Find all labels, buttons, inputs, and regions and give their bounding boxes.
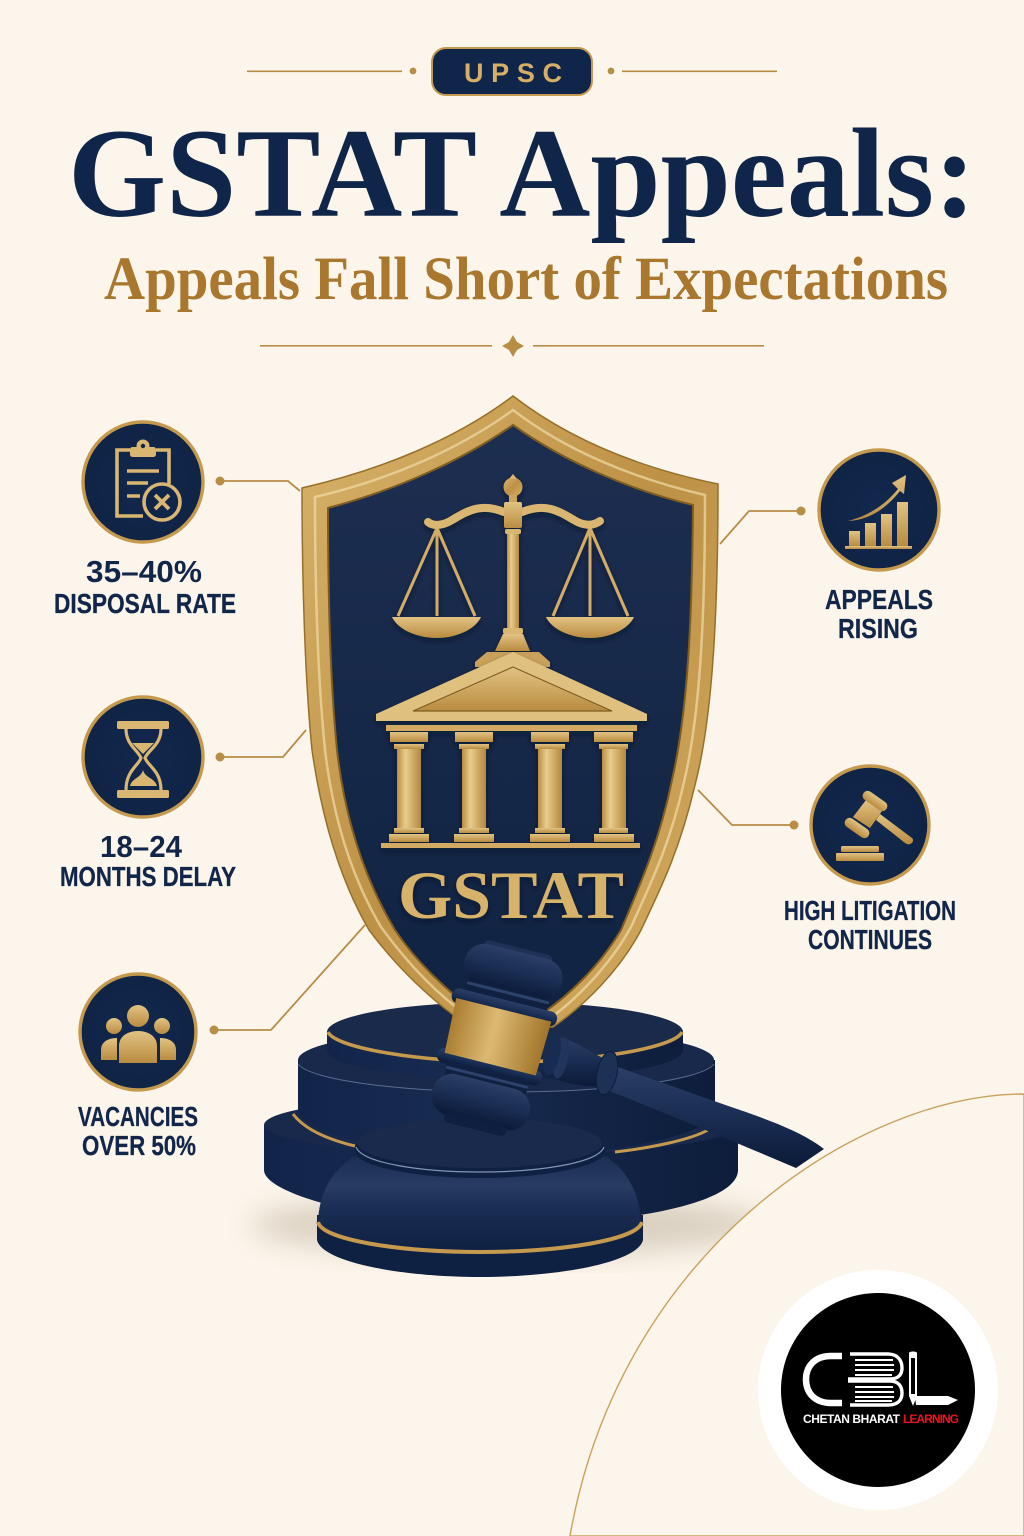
divider with diamond	[260, 335, 764, 357]
stat: high litigation	[784, 766, 956, 955]
icon: hourglass	[83, 697, 203, 817]
header rule right	[608, 68, 777, 74]
stat: disposal rate	[54, 422, 236, 619]
label: 18-24 months delay: 18–24	[100, 829, 183, 864]
logo letter L as pencils	[909, 1352, 958, 1406]
title: GSTAT Appeals:	[68, 104, 976, 244]
sound block base	[317, 1215, 643, 1277]
logo letter C	[806, 1356, 842, 1403]
icon: judge gavel	[811, 766, 929, 884]
pedestal tiers	[264, 1002, 738, 1225]
sound block dome	[318, 1150, 641, 1252]
connector lines	[210, 476, 806, 1034]
stat: months delay	[60, 697, 236, 892]
badge: UPSC: UPSC	[464, 58, 562, 88]
icon: clipboard with cross	[83, 422, 203, 542]
header rule left	[247, 68, 416, 74]
label: high litigation continues: HIGH LITIGATION	[784, 895, 956, 926]
stat: vacancies	[78, 974, 198, 1161]
badge: UPSC	[432, 48, 592, 95]
courthouse	[376, 652, 647, 848]
subtitle: Appeals Fall Short of Expectations	[104, 246, 948, 313]
logo white ring	[758, 1270, 998, 1510]
label: appeals rising: RISING	[838, 613, 918, 644]
label: vacancies over 50%: VACANCIES	[78, 1101, 198, 1132]
bottom-right arc panel	[570, 1094, 1024, 1536]
label: appeals rising	[825, 584, 933, 644]
gavel handle	[540, 1031, 824, 1168]
stat: appeals rising	[819, 450, 939, 644]
label: 18-24 months delay	[60, 829, 236, 892]
shield emblem	[302, 396, 718, 1027]
label: vacancies over 50%: OVER 50%	[82, 1130, 196, 1161]
sound block	[317, 1118, 643, 1277]
shield frame	[302, 396, 718, 1027]
label: 35-40% disposal rate: 35–40%	[86, 554, 202, 589]
shield frame highlight	[315, 410, 705, 1020]
top tier	[327, 1002, 683, 1080]
middle tier	[293, 1028, 715, 1156]
logo: CBL	[758, 1270, 998, 1510]
label: high litigation continues: CONTINUES	[808, 924, 932, 955]
label: 35-40% disposal rate	[54, 554, 236, 619]
logo wordmark: CHETAN BHARAT	[803, 1412, 901, 1426]
gavel head	[422, 935, 572, 1142]
GSTAT shield wordmark: GSTAT	[398, 857, 624, 933]
logo letter B as books	[848, 1354, 902, 1405]
label: high litigation continues	[784, 895, 956, 955]
label: 18-24 months delay: MONTHS DELAY	[60, 861, 236, 892]
sound block top disc	[354, 1122, 606, 1178]
icon: rising bar chart	[819, 450, 939, 570]
logo wordmark	[803, 1412, 959, 1426]
label: vacancies over 50%	[78, 1101, 198, 1161]
scales of justice	[392, 474, 634, 667]
shield navy field	[328, 425, 693, 1015]
gavel	[422, 935, 824, 1168]
bottom tier	[264, 1095, 738, 1225]
logo black disc	[781, 1293, 975, 1487]
header	[68, 48, 976, 357]
logo wordmark: LEARNING	[903, 1412, 959, 1426]
label: appeals rising: APPEALS	[825, 584, 933, 615]
icon: people	[80, 974, 196, 1090]
label: 35-40% disposal rate: DISPOSAL RATE	[54, 588, 236, 619]
ground shadow	[250, 1195, 770, 1255]
